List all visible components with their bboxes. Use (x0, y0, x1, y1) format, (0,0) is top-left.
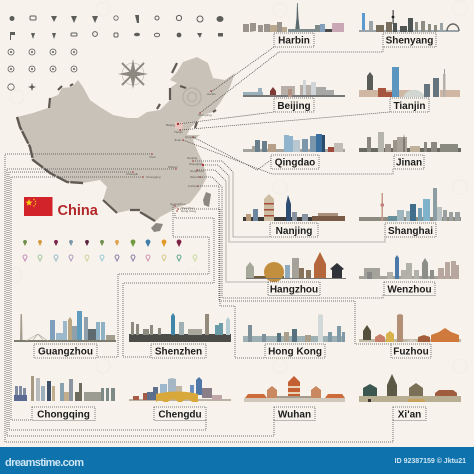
skyline: Hong Kong (243, 314, 345, 342)
city markers on map: Nanjing (187, 156, 198, 160)
label: Shanghai (385, 223, 436, 237)
skyline: Xi'an (359, 374, 461, 402)
city markers on map: Chongqing (146, 175, 161, 179)
city markers on map: Beijing (166, 123, 175, 127)
skyline: Jinan (359, 132, 461, 152)
label: Hangzhou: Hangzhou (270, 284, 318, 296)
label: Chongqing (32, 407, 95, 420)
city markers on map: Hong Kong (181, 209, 196, 213)
skyline: Guangzhou (14, 311, 116, 342)
label: Beijing: Beijing (277, 101, 311, 112)
label: Wenzhou: Wenzhou (387, 284, 432, 296)
label: Tianjin (390, 98, 429, 112)
heading: China: China (58, 203, 99, 219)
skyline: Wenzhou (359, 255, 459, 279)
label: Wuhan (274, 407, 315, 420)
city markers on map: Jinan (174, 138, 182, 142)
skyline: Fuzhou (359, 314, 461, 342)
label: Qingdao (271, 155, 319, 169)
city markers on map: Chengdu (126, 172, 139, 176)
label: Fuzhou (391, 344, 431, 358)
footer logo text: dreamstime.com (5, 457, 84, 469)
label: Harbin (274, 33, 314, 47)
label: Harbin: Harbin (278, 36, 310, 46)
label: Nanjing: Nanjing (276, 226, 312, 237)
label: Xi'an (393, 407, 426, 420)
flag of China (24, 197, 52, 216)
label: Nanjing (270, 223, 318, 237)
location pins: filled row (23, 240, 182, 247)
city markers on map: Wenzhou (190, 175, 203, 179)
skyline: Harbin (243, 3, 344, 32)
label: Shenzhen: Shenzhen (155, 346, 202, 358)
footer bar (0, 447, 474, 474)
label: Hong Kong: Hong Kong (268, 346, 322, 358)
city markers on map: Shenyang (198, 113, 212, 117)
label: Xi'an: Xi'an (398, 410, 421, 420)
city markers on map: Shanghai (189, 162, 202, 166)
connector lines (5, 47, 393, 442)
skyline: Beijing (243, 80, 345, 97)
city markers on map: Hangzhou (190, 169, 204, 173)
skyline: Nanjing (243, 194, 345, 221)
label: Shenyang: Shenyang (386, 36, 433, 46)
skyline: Hangzhou (246, 252, 346, 282)
skyline: Wuhan (244, 376, 345, 402)
city markers on map: Qingdao (185, 135, 197, 139)
city markers on map (126, 90, 216, 213)
skyline: Chongqing (14, 376, 115, 401)
city markers on map: Shenzhen (181, 206, 195, 210)
skyline: Shenzhen (129, 313, 231, 342)
city markers on map: Wuhan (168, 165, 178, 169)
label: Shenzhen (151, 344, 206, 358)
label: Guangzhou (34, 344, 97, 358)
label: Chongqing: Chongqing (37, 410, 90, 420)
label: Chengdu (154, 407, 206, 420)
label: Beijing (274, 98, 314, 112)
icon set: map markers (8, 15, 223, 91)
icon: compass rose (118, 59, 148, 89)
label: Wuhan: Wuhan (278, 410, 311, 420)
city markers on map: Harbin (207, 92, 216, 96)
skyline: Shanghai (359, 188, 461, 221)
label: Qingdao: Qingdao (275, 158, 315, 168)
skyline: Chengdu (129, 377, 231, 402)
city markers on map: Xi'an (149, 155, 156, 159)
city markers on map: Tianjin (174, 130, 183, 134)
Hainan and Taiwan islands (151, 192, 211, 232)
label: Guangzhou: Guangzhou (38, 346, 93, 358)
label: Shanghai: Shanghai (388, 226, 433, 237)
label: Jinan: Jinan (396, 158, 422, 168)
skyline: Qingdao (243, 134, 345, 152)
city markers on map: Fuzhou (188, 184, 198, 188)
skyline: Shenyang (359, 10, 459, 32)
city markers on map: Guangzhou (170, 202, 186, 206)
label: Tianjin: Tianjin (393, 101, 426, 112)
label: Fuzhou: Fuzhou (393, 346, 429, 358)
label: Chengdu: Chengdu (158, 410, 202, 420)
location pins: outlined row (23, 255, 197, 261)
skyline: Tianjin (359, 67, 460, 97)
label: Jinan (394, 155, 424, 169)
footer id text: ID 92387159 © Jktu21 (395, 457, 466, 465)
map of China (17, 57, 235, 232)
